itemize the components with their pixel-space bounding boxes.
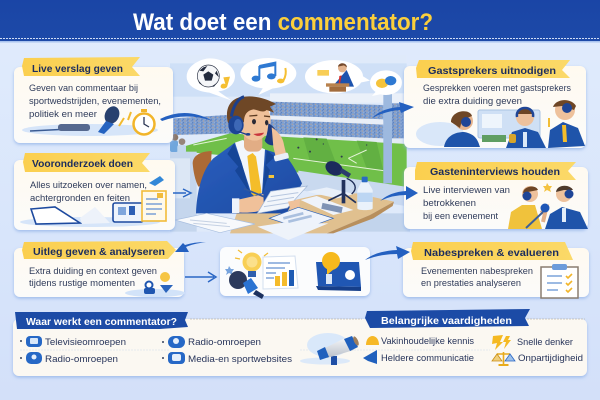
skill: onpartijdigheid — [492, 352, 583, 366]
item: media- en sportwebsites: Media-en sportwebsites — [188, 354, 292, 365]
icons: people and lightbulb — [125, 272, 185, 297]
desk papers — [175, 187, 354, 240]
arrow: to uitleg geven — [175, 242, 206, 252]
description: en prestaties analyseren — [421, 278, 521, 289]
section: waar werkt een commentator — [15, 312, 292, 365]
description: Geven van commentaar bij — [29, 83, 138, 94]
stadium window view — [170, 55, 410, 232]
description: Live interviewen van — [423, 185, 510, 196]
description: bij een evenement — [423, 211, 498, 222]
ribbon heading: Vooronderzoek doen — [32, 158, 133, 170]
icons: books, tablet and document — [20, 176, 166, 227]
speech bubble: football — [187, 58, 235, 101]
item: radio-omroepen — [20, 352, 118, 365]
ribbon heading: Gasteninterviews houden — [430, 166, 560, 178]
section: belangrijke vaardigheden — [363, 309, 583, 366]
ribbon heading — [22, 57, 140, 76]
ribbon heading — [15, 312, 188, 329]
item: televisieomroepen — [20, 336, 126, 348]
commentator figure — [196, 96, 307, 213]
ribbon heading — [415, 162, 576, 180]
ribbon heading: Uitleg geven & analyseren — [33, 246, 165, 258]
arrow: uitleg to analysis visuals — [185, 272, 216, 282]
title: Wat doet een commentator? — [133, 9, 433, 36]
panel: gasteninterviews houden — [404, 162, 588, 229]
panel: live verslag geven — [14, 57, 173, 143]
panel: analysis visuals — [220, 247, 370, 299]
ribbon heading — [23, 153, 150, 172]
skill: vakinhoudelijke kennis: Vakinhoudelijke kennis — [381, 336, 474, 347]
arrow: live verslag to commentator — [160, 113, 213, 121]
description: Extra duiding en context geven — [29, 266, 157, 277]
speech bubble: speaker at lectern — [305, 60, 370, 93]
panel: uitleg geven en analyseren — [14, 241, 185, 297]
arrow: to gasteninterviews — [380, 186, 418, 201]
item: radio-omroepen: Radio-omroepen — [45, 354, 118, 365]
icon: screen with chat bubble — [316, 252, 361, 291]
icon: handheld microphone — [229, 271, 264, 299]
item: televisieomroepen: Televisieomroepen — [45, 337, 126, 348]
ribbon heading: Live verslag geven — [32, 63, 123, 75]
icon: clipboard checklist — [541, 264, 578, 298]
skill: onpartijdigheid: Onpartijdigheid — [518, 353, 583, 364]
description: sportwedstrijden, evenementen, — [29, 96, 161, 107]
skill: heldere communicatie: Heldere communicatie — [381, 353, 474, 364]
description: Alles uitzoeken over namen, — [30, 180, 147, 191]
arrow: to nabespreken — [365, 246, 410, 260]
arrow: to gastsprekers — [372, 102, 414, 118]
panel: bottom information — [13, 309, 587, 376]
icon: lightbulb — [225, 250, 268, 277]
description: betrokkenen — [423, 198, 476, 209]
header banner — [0, 0, 600, 42]
speech bubble: chat — [370, 70, 402, 96]
panel: vooronderzoek doen — [14, 153, 175, 230]
ribbon heading — [416, 60, 570, 78]
desk microphone — [323, 158, 356, 203]
arrow: vooronderzoek to commentator — [173, 189, 191, 197]
speech bubble: music notes — [240, 58, 296, 95]
ribbon heading — [411, 242, 573, 260]
ribbon heading — [22, 241, 176, 259]
water bottle — [357, 177, 373, 210]
chair — [193, 151, 212, 187]
icons: notepad, microphone and stopwatch — [22, 104, 158, 136]
item: radio-omroepen second column — [162, 336, 261, 348]
description: Gesprekken voeren met gastsprekers — [423, 83, 571, 94]
description: Evenementen nabespreken — [421, 266, 533, 277]
description: achtergronden en feiten — [30, 193, 130, 204]
icon: report with bar chart — [263, 256, 298, 289]
ribbon heading: Nabespreken & evalueren — [424, 247, 559, 259]
ribbon heading: Gastsprekers uitnodigen — [428, 65, 556, 77]
ribbon heading — [365, 309, 530, 328]
panel: nabespreken en evalueren — [403, 242, 589, 298]
ribbon heading: Belangrijke vaardigheden — [381, 315, 512, 327]
description: tijdens rustige momenten — [29, 278, 135, 289]
description: die extra duiding geven — [423, 96, 522, 107]
skill: heldere communicatie — [363, 350, 474, 364]
panel: gastsprekers uitnodigen — [404, 60, 586, 148]
skill: snelle denker — [492, 335, 573, 350]
item: media- en sportwebsites — [162, 352, 292, 365]
illustration: large megaphone — [300, 333, 360, 365]
ribbon heading: Waar werkt een commentator? — [26, 316, 177, 328]
illustration: three presenters in studio — [416, 100, 585, 148]
item: radio-omroepen second column: Radio-omroepen — [188, 337, 261, 348]
desk — [230, 193, 394, 233]
description: politiek en meer — [29, 109, 97, 120]
central illustration: commentator in stadium booth — [170, 55, 410, 240]
skill: snelle denker: Snelle denker — [517, 337, 573, 348]
illustration: interview with athlete — [508, 183, 588, 229]
